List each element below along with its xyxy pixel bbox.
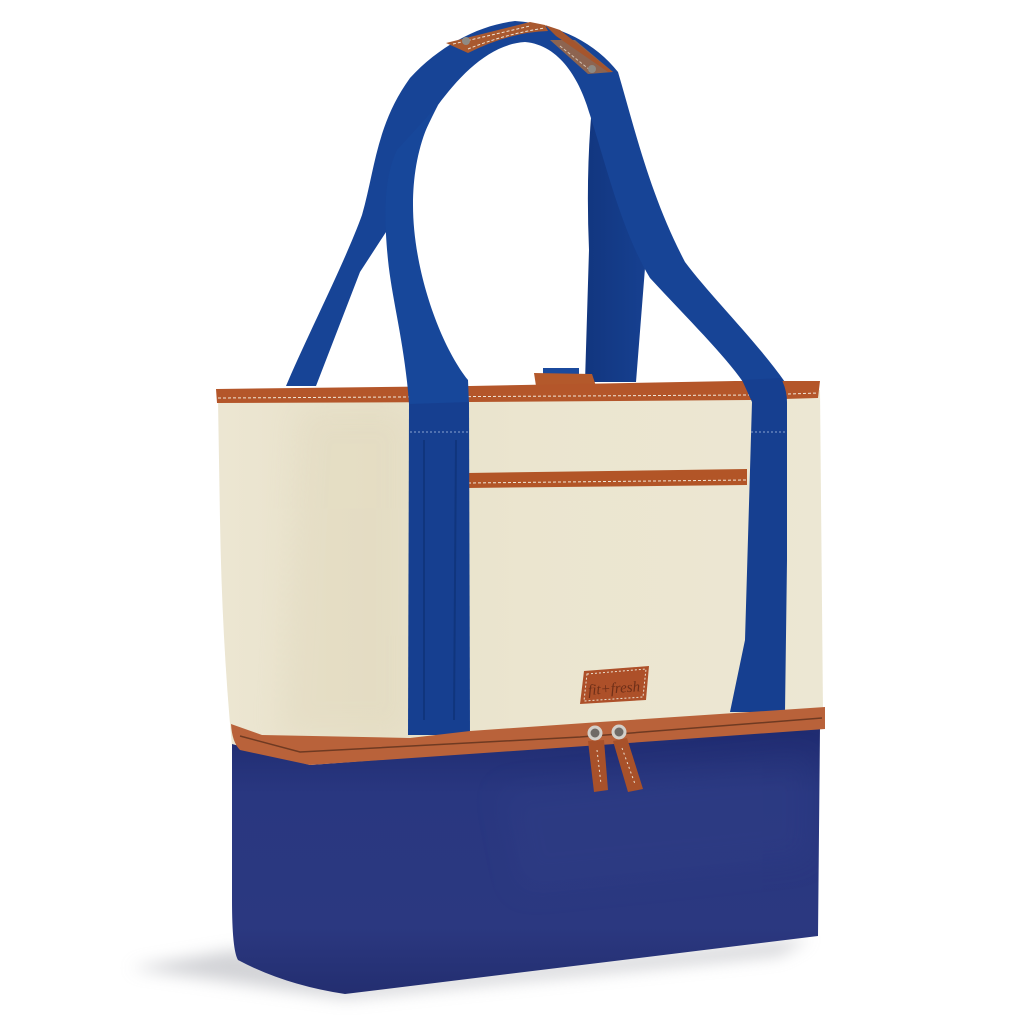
canvas side fold shading — [280, 410, 410, 735]
handle arch: rear left strap over top to front right strap — [286, 21, 787, 404]
front right strap lower panel — [730, 378, 787, 712]
front left strap — [385, 105, 470, 735]
brand leather patch — [580, 666, 649, 704]
back strap: rear right band — [585, 118, 645, 382]
navy cooler base — [232, 727, 820, 994]
front pocket binding — [467, 469, 747, 488]
leather handle wrap — [446, 22, 613, 74]
zipper pull left — [588, 727, 608, 792]
illustration: canvas and navy cooler tote bag — [142, 21, 825, 1004]
canvas body — [218, 390, 823, 746]
ground shadow — [130, 938, 810, 998]
buckle tab behind rim — [534, 368, 596, 386]
brand leather patch: fit+fresh — [588, 679, 641, 699]
zipper band — [231, 707, 825, 765]
zipper pull right — [613, 726, 643, 792]
rim: brown top binding — [216, 381, 820, 403]
cooler sheen — [500, 755, 810, 890]
